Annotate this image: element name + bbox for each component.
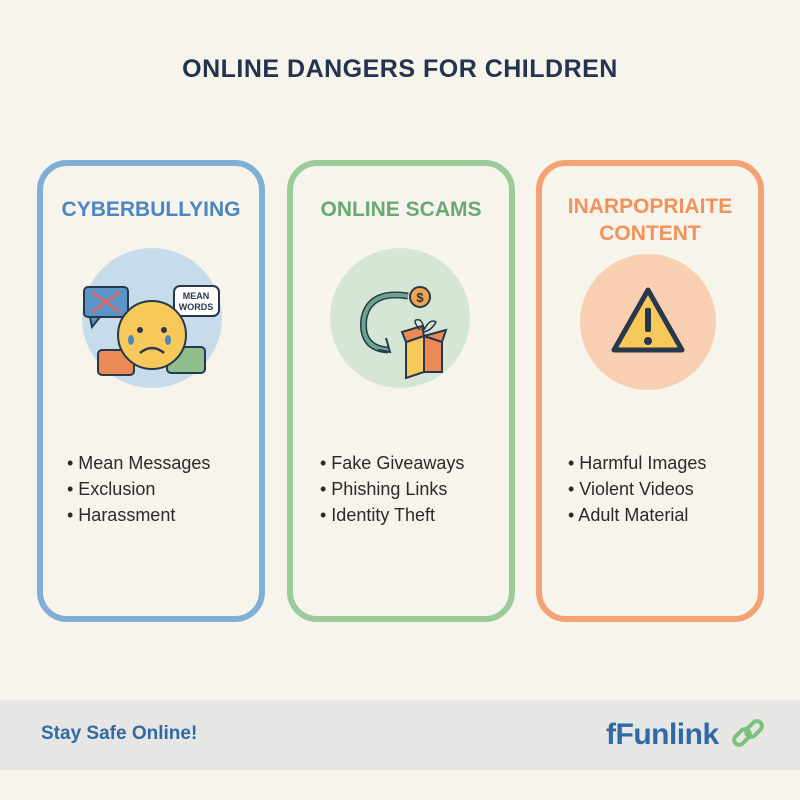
title: ONLINE DANGERS FOR CHILDREN <box>182 55 618 83</box>
footer band <box>0 700 800 770</box>
heading: inappropriate content <box>568 195 732 245</box>
icon: sad face with speech bubbles: WORDS <box>179 302 213 312</box>
heading: inappropriate content: CONTENT <box>599 222 701 245</box>
icon: warning sign <box>580 254 716 390</box>
list: online scams: • Fake Giveaways <box>320 453 464 473</box>
heading: cyberbullying: CYBERBULLYING <box>62 198 240 221</box>
list: cyberbullying: • Harassment <box>67 505 175 525</box>
icon: hook and gift <box>330 248 470 388</box>
list: online scams: • Identity Theft <box>320 505 435 525</box>
heading: online scams: ONLINE SCAMS <box>320 198 482 221</box>
footer slogan: Stay Safe Online! <box>41 723 197 744</box>
list: inappropriate content <box>568 453 706 525</box>
icon: hook and gift: $ <box>416 290 424 305</box>
list: cyberbullying: • Mean Messages <box>67 453 210 473</box>
panel: cyberbullying <box>37 160 265 622</box>
list: inappropriate content: • Harmful Images <box>568 453 706 473</box>
heading: inappropriate content: INARPOPRIAITE <box>568 195 732 218</box>
list: inappropriate content: • Adult Material <box>568 505 688 525</box>
panel: online scams <box>287 160 515 622</box>
logo: funlink: fFunlink <box>606 718 719 751</box>
list: inappropriate content: • Violent Videos <box>568 479 694 499</box>
list: online scams <box>320 453 464 525</box>
icon: sad face with speech bubbles <box>82 248 222 388</box>
list: cyberbullying: • Exclusion <box>67 479 155 499</box>
list: cyberbullying <box>67 453 210 525</box>
list: online scams: • Phishing Links <box>320 479 447 499</box>
icon: sad face with speech bubbles: MEAN <box>183 291 209 301</box>
panel: inappropriate content <box>536 160 764 622</box>
